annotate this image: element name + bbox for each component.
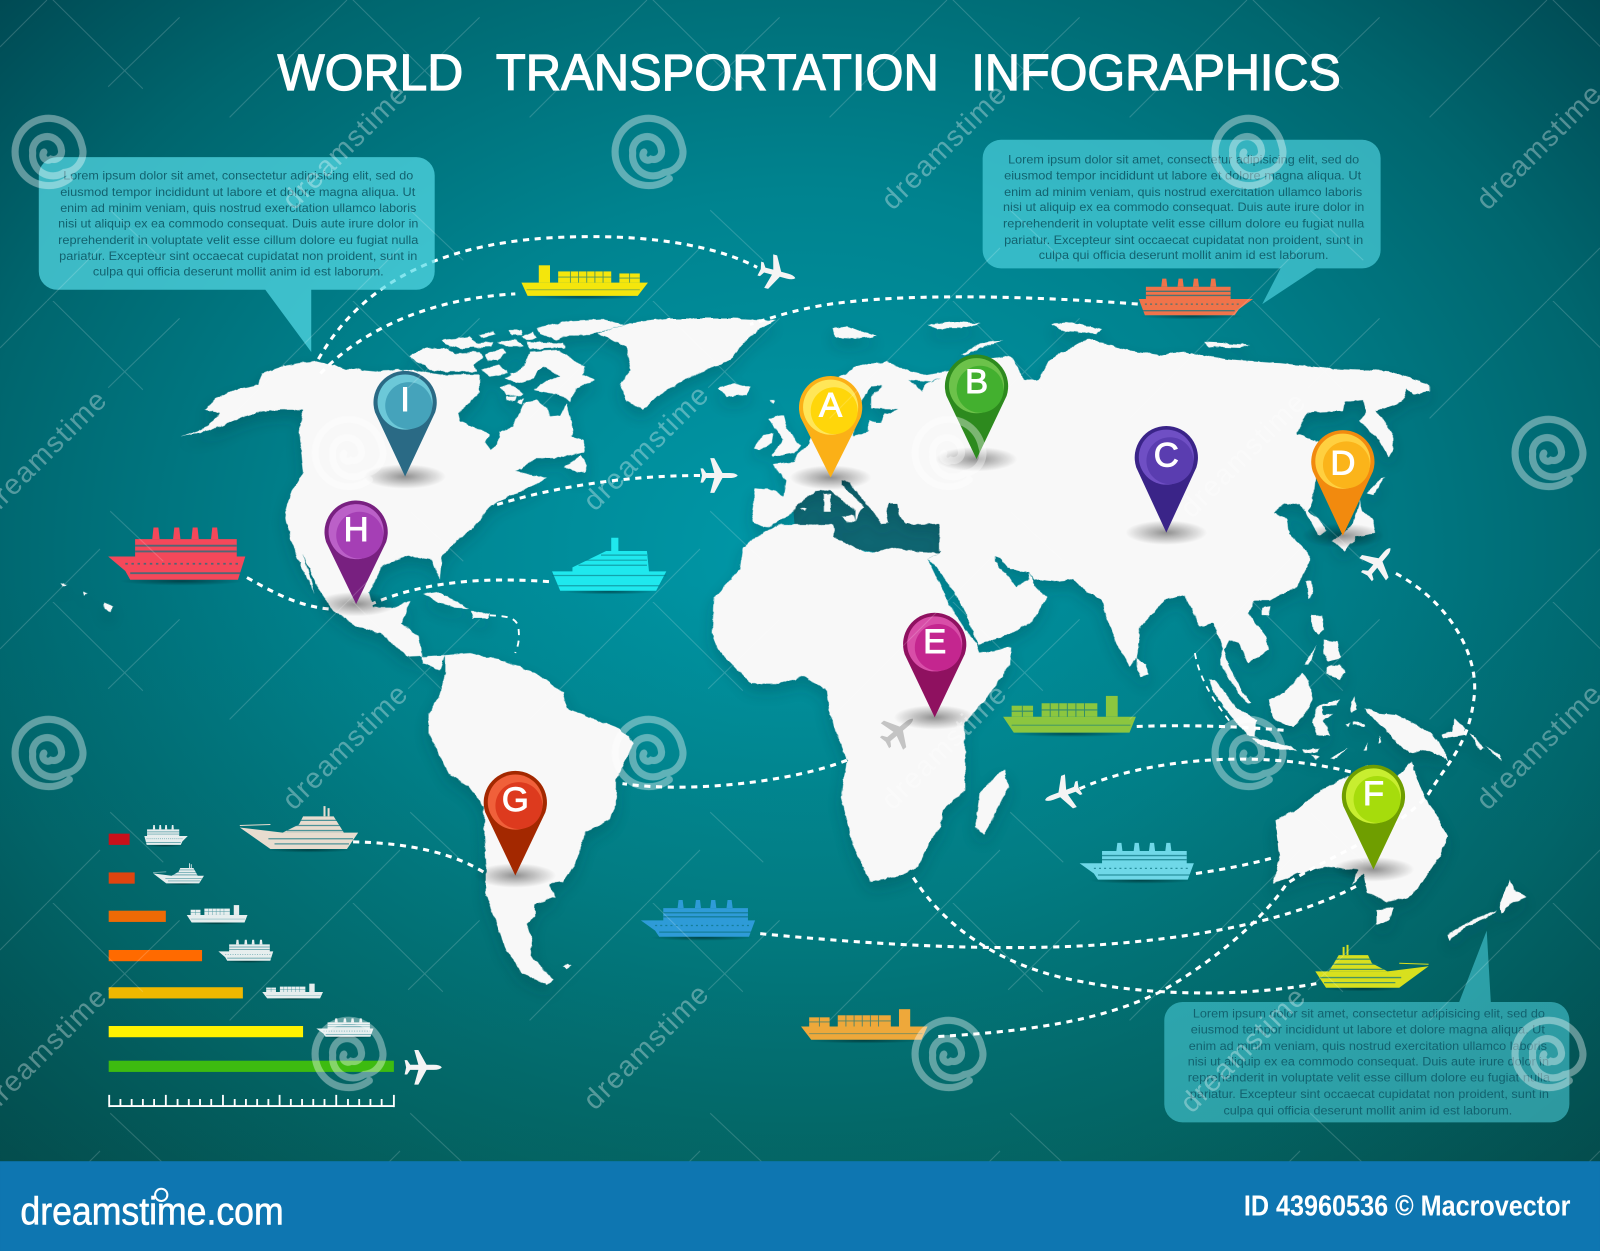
caribbean and hawaii xyxy=(61,583,572,968)
callout text: Lorem ipsum dolor sit amet, consectetur adipisicing elit, sed do xyxy=(63,169,413,183)
bar 6 xyxy=(109,1018,373,1039)
callout text: reprehenderit in voluptate velit esse cillum dolore eu fugiat nulla xyxy=(58,233,419,247)
callout text: Lorem ipsum dolor sit amet, consectetur adipisicing elit, sed do xyxy=(1008,152,1359,166)
watermark text: dreamstime xyxy=(577,977,716,1116)
tasmania xyxy=(1377,907,1394,924)
ship: red cruise xyxy=(108,528,245,586)
callout text: reprehenderit in voluptate velit esse cillum dolore eu fugiat nulla xyxy=(1188,1071,1550,1085)
greenland xyxy=(598,318,776,410)
pin D: D xyxy=(1330,444,1355,482)
new zealand xyxy=(1448,880,1527,940)
pin F xyxy=(1333,765,1414,882)
pin B: B xyxy=(965,363,988,401)
bar 5 xyxy=(109,984,323,1000)
pin G xyxy=(474,771,556,888)
plane: indian ocean xyxy=(1039,771,1086,816)
footer band xyxy=(0,1161,1600,1251)
callout text: eiusmod tempor incididunt ut labore et dolore magna aliqua. Ut xyxy=(1191,1023,1545,1037)
route lines xyxy=(247,237,1475,1037)
callout: top left xyxy=(39,157,435,352)
callout text xyxy=(58,169,419,279)
dreamstime logo: dreamstime.com xyxy=(20,1190,284,1233)
pin H xyxy=(315,500,397,616)
callout text: nisi ut aliquip ex ea commodo consequat. Duis aute irure dolor in xyxy=(58,217,419,231)
title: INFOGRAPHICS xyxy=(971,44,1341,101)
pin B xyxy=(936,355,1017,471)
africa xyxy=(712,524,1011,882)
bar 3 xyxy=(109,905,247,925)
pin E xyxy=(894,613,976,730)
pin G: G xyxy=(502,781,529,819)
arctic russian islands xyxy=(833,321,1250,348)
ship: yellow container xyxy=(521,265,648,299)
bar chart legend xyxy=(109,825,442,1107)
plane: africa grey xyxy=(873,706,924,756)
madagascar xyxy=(976,768,1008,835)
bar 7 xyxy=(109,1050,442,1085)
canadian arctic islands and newfoundland xyxy=(410,319,623,473)
pin I: I xyxy=(400,381,410,419)
callout text: nisi ut aliquip ex ea commodo consequat. Duis aute irure dolor in xyxy=(1188,1054,1549,1068)
callout text: culpa qui officia deserunt mollit anim id est laborum. xyxy=(1039,248,1329,262)
ship: blue cruise xyxy=(641,900,755,941)
mediterranean sea tint xyxy=(791,480,954,563)
iceland xyxy=(717,384,751,397)
ship: orange container xyxy=(801,1009,928,1043)
watermark text: dreamstime xyxy=(875,77,1014,216)
asia xyxy=(928,339,1430,704)
bar 1 xyxy=(109,825,188,847)
watermark text: dreamstime xyxy=(276,77,415,216)
pin A xyxy=(790,376,871,490)
title xyxy=(278,44,1341,101)
callout: top right xyxy=(983,140,1381,304)
scale ruler xyxy=(109,1095,394,1107)
pin E: E xyxy=(923,623,946,661)
australia xyxy=(1273,761,1448,902)
pin H: H xyxy=(344,511,369,549)
north america xyxy=(181,361,585,670)
bar 4 xyxy=(109,940,273,963)
ship: light blue cruise xyxy=(1080,843,1194,884)
south-east asia islands xyxy=(1208,607,1502,763)
ship: green container xyxy=(1003,696,1136,737)
watermark spirals xyxy=(15,118,1583,1088)
callout text: culpa qui officia deserunt mollit anim id est laborum. xyxy=(1223,1103,1512,1117)
callout text: pariatur. Excepteur sint occaecat cupidatat non proident, sunt in xyxy=(1004,233,1363,247)
pin F: F xyxy=(1363,775,1384,813)
sri lanka xyxy=(1137,658,1148,677)
callout text xyxy=(1188,1006,1550,1117)
ship: cyan ferry xyxy=(552,538,666,594)
plane: north atlantic top xyxy=(755,252,800,295)
bar 2 xyxy=(109,863,204,885)
callout text: eiusmod tempor incididunt ut labore et dolore magna aliqua. Ut xyxy=(60,185,416,199)
korea and japan xyxy=(1307,477,1385,598)
callout text xyxy=(1003,152,1364,262)
callout: bottom right xyxy=(1164,931,1569,1122)
title: WORLD xyxy=(278,44,463,101)
callout text: eiusmod tempor incididunt ut labore et dolore magna aliqua. Ut xyxy=(1004,169,1362,183)
callout text: culpa qui officia deserunt mollit anim id est laborum. xyxy=(93,265,384,279)
ship: yellow-green yacht xyxy=(1315,945,1429,991)
watermark text: dreamstime xyxy=(1174,385,1313,524)
british isles and med islands xyxy=(753,340,1003,522)
plane: japan xyxy=(1353,537,1404,588)
south america xyxy=(429,653,634,985)
plane: atlantic xyxy=(701,458,738,493)
watermark text: dreamstime xyxy=(875,677,1014,816)
watermark text: dreamstime xyxy=(276,677,415,816)
callout text: Lorem ipsum dolor sit amet, consectetur adipisicing elit, sed do xyxy=(1193,1006,1545,1020)
pin C xyxy=(1126,426,1207,545)
callout text: reprehenderit in voluptate velit esse cillum dolore eu fugiat nulla xyxy=(1003,217,1364,231)
title: TRANSPORTATION xyxy=(496,44,939,101)
ship: beige yacht xyxy=(240,806,358,853)
europe xyxy=(752,340,1020,553)
callout text: nisi ut aliquip ex ea commodo consequat. Duis aute irure dolor in xyxy=(1003,200,1364,214)
callout text: enim ad minim veniam, quis nostrud exercitation ullamco laboris xyxy=(1004,185,1362,199)
callout text: pariatur. Excepteur sint occaecat cupidatat non proident, sunt in xyxy=(1190,1087,1549,1101)
ship: orange cruise xyxy=(1139,279,1253,319)
watermark text: dreamstime xyxy=(1174,980,1313,1119)
pin A: A xyxy=(819,386,843,424)
new guinea xyxy=(1365,708,1450,763)
pin D xyxy=(1302,430,1384,548)
pin I xyxy=(364,371,446,489)
world map xyxy=(61,318,1527,985)
callout text: enim ad minim veniam, quis nostrud exercitation ullamco laboris xyxy=(60,201,416,215)
callout text: pariatur. Excepteur sint occaecat cupidatat non proident, sunt in xyxy=(59,249,418,263)
pin C: C xyxy=(1154,436,1179,474)
callout text: enim ad minim veniam, quis nostrud exercitation ullamco laboris xyxy=(1189,1039,1547,1053)
watermark text: dreamstime xyxy=(577,378,716,517)
